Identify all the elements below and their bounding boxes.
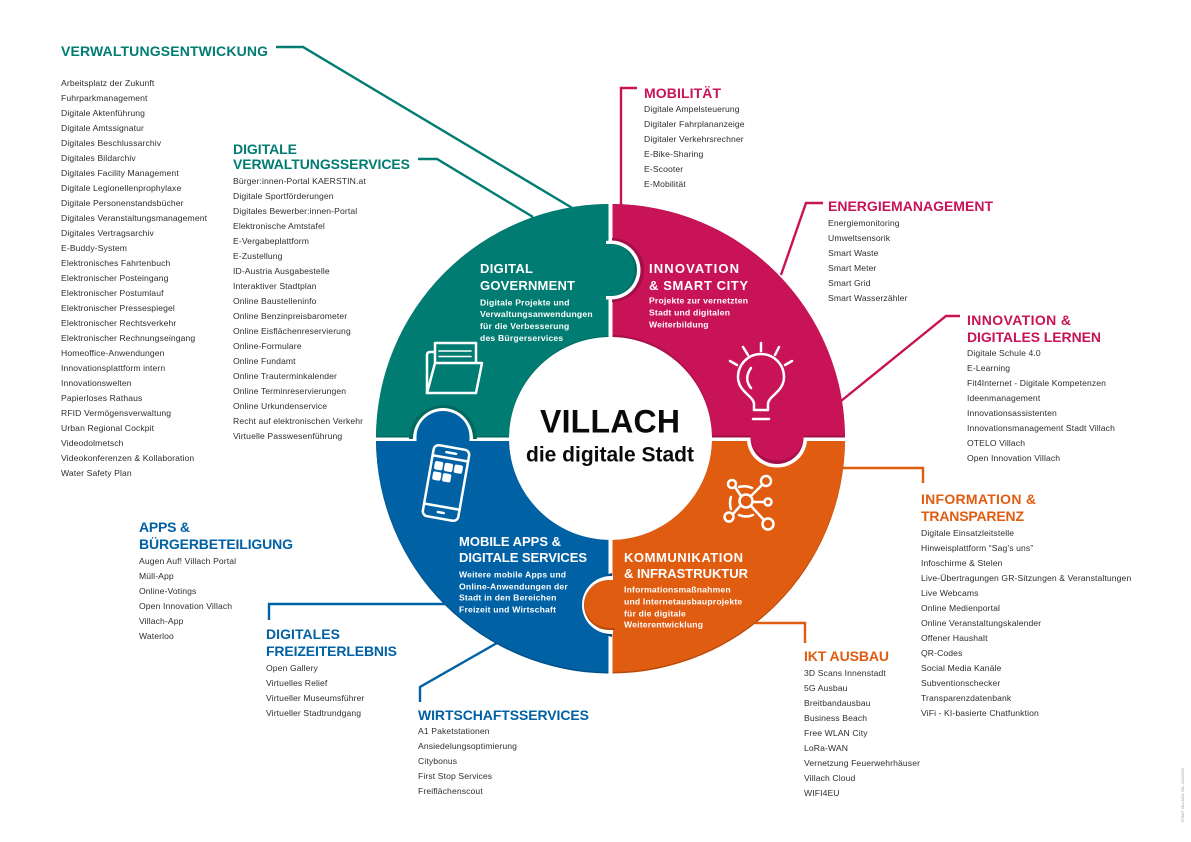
text block: Wirtschaftsservices: Ansiedelungsoptimierung [418,741,517,751]
connector: Innovation und digitales Lernen [841,316,960,401]
text block: Wirtschaftsservices: WIRTSCHAFTSSERVICES [418,707,589,723]
heading: Innovation und Smart City panel text: & SMART CITY [649,278,748,293]
text block: Information und Transparenz: Transparenzdatenbank [921,693,1012,703]
text block: IKT Ausbau: Business Beach [804,713,867,723]
text block: Information und Transparenz: Offener Haushalt [921,633,988,643]
heading: Mobile Apps panel text: Freizeit und Wirtschaft [459,604,556,614]
heading: Digital Government panel text: Digitale Projekte und [480,298,570,308]
text block: Mobilität: Digitaler Fahrplananzeige [644,119,745,129]
text block: Innovation und digitales Lernen: DIGITALES LERNEN [967,329,1101,345]
text block: Verwaltungsentwicklung: Videodolmetsch [61,438,124,448]
text block: Verwaltungsentwicklung: Elektronischer Rechtsverkehr [61,318,176,328]
icon: smartphone [422,444,470,522]
text block: IKT Ausbau: Villach Cloud [804,773,856,783]
text block: IKT Ausbau: LoRa-WAN [804,743,848,753]
text block: Verwaltungsentwicklung: Water Safety Plan [61,468,132,478]
heading: Digital Government panel text: GOVERNMENT [480,278,575,293]
text block: Digitales Freizeiterlebnis: Open Gallery [266,663,319,673]
text block: IKT Ausbau: 5G Ausbau [804,683,848,693]
text block: Information und Transparenz: ViFi - KI-basierte Chatfunktion [921,708,1039,718]
text block: Digitale Verwaltungsservices: E-Zustellung [233,251,283,261]
heading: Innovation und Smart City panel text: INNOVATION [649,261,739,276]
text block: Digitales Freizeiterlebnis: DIGITALES [266,626,340,642]
connector: Digitales Freizeiterlebnis [269,604,459,620]
text block: Verwaltungsentwicklung: Videokonferenzen & Kollaboration [61,453,194,463]
text block: IKT Ausbau [804,648,920,798]
text block: Innovation und digitales Lernen: Fit4Internet - Digitale Kompetenzen [967,378,1106,388]
text block: Mobilität: E-Bike-Sharing [644,149,703,159]
text block: Innovation und digitales Lernen: Innovationsassistenten [967,408,1057,418]
text block: Wirtschaftsservices: Freiflächenscout [418,786,483,796]
text block: Innovation und digitales Lernen: Innovationsmanagement Stadt Villach [967,423,1115,433]
heading: Kommunikation panel text [624,550,749,630]
text block: Digitales Freizeiterlebnis: Virtueller Museumsführer [266,693,365,703]
text block: Digitale Verwaltungsservices: Online-Formulare [233,341,302,351]
text block: Energiemanagement: Umweltsensorik [828,233,891,243]
text block: IKT Ausbau: IKT AUSBAU [804,648,889,664]
text block: Verwaltungsentwicklung: Digitales Beschlussarchiv [61,138,162,148]
text block: Verwaltungsentwicklung: Digitale Legionellenprophylaxe [61,183,181,193]
text block: Information und Transparenz: Subventionschecker [921,678,1000,688]
heading: Innovation und Smart City panel text [649,261,748,330]
text block: Mobilität: Digitaler Verkehrsrechner [644,134,744,144]
text block: Digitales Freizeiterlebnis [266,626,397,718]
text block: Verwaltungsentwicklung: Digitale Personenstandsbücher [61,198,184,208]
connector: IKT Ausbau [755,623,805,643]
text block: Energiemanagement: ENERGIEMANAGEMENT [828,198,993,214]
text block: Energiemanagement: Smart Wasserzähler [828,293,908,303]
text block: Information und Transparenz [921,491,1131,718]
heading: Innovation und Smart City panel text: Projekte zur vernetzten [649,296,748,306]
heading: Mobile Apps panel text: Online-Anwendungen der [459,582,568,592]
text block: Digitale Verwaltungsservices [233,141,410,441]
text block: Verwaltungsentwicklung: RFID Vermögensverwaltung [61,408,171,418]
connector: Digitale Verwaltungsservices [418,159,533,217]
text block: Mobilität: Digitale Ampelsteuerung [644,104,740,114]
text block: Verwaltungsentwicklung: Digitale Amtssignatur [61,123,144,133]
text block: Innovation und digitales Lernen: E-Learning [967,363,1010,373]
text block: Digitale Verwaltungsservices: ID-Austria Ausgabestelle [233,266,330,276]
heading: Innovation und Smart City panel text: Stadt und digitalen [649,308,730,318]
panel: Mobile Apps und digitale Services sector [376,441,608,674]
heading: Digital Government panel text: für die Verbesserung [480,321,570,331]
text block: Verwaltungsentwicklung: Digitale Aktenführung [61,108,145,118]
text block: Apps und Bürgerbeteiligung: Müll-App [139,571,174,581]
heading: Mobile Apps panel text [459,534,587,614]
text block: Verwaltungsentwicklung: Homeoffice-Anwendungen [61,348,165,358]
text block: Information und Transparenz: Hinweisplattform “Sag’s uns” [921,543,1033,553]
text block: IKT Ausbau: Free WLAN City [804,728,868,738]
text block: Verwaltungsentwicklung: Arbeitsplatz der Zukunft [61,78,155,88]
text block: Verwaltungsentwicklung: Innovationswelten [61,378,132,388]
text block: Wirtschaftsservices [418,707,589,796]
heading: Digital Government panel text: des Bürgerservices [480,333,563,343]
text block: Verwaltungsentwicklung [61,43,268,478]
heading: Kommunikation panel text: & INFRASTRUKTUR [624,566,749,581]
text block: Digitale Verwaltungsservices: Online Terminreservierungen [233,386,346,396]
text block: Digitale Verwaltungsservices: Bürger:innen-Portal KAERSTIN.at [233,176,366,186]
text block: IKT Ausbau: Breitbandausbau [804,698,871,708]
text block: Digitale Verwaltungsservices: VERWALTUNGSSERVICES [233,156,410,172]
heading: Digital Government panel text [480,261,593,343]
panel: Digital Government sector [376,204,608,438]
text block: Verwaltungsentwicklung: Digitales Bildarchiv [61,153,136,163]
text block: Verwaltungsentwicklung: E-Buddy-System [61,243,127,253]
text block: Digitale Verwaltungsservices: E-Vergabeplattform [233,236,309,246]
heading: Kommunikation panel text: Informationsmaßnahmen [624,584,731,594]
text block: Digitale Verwaltungsservices: Recht auf elektronischen Verkehr [233,416,363,426]
text block: Innovation und digitales Lernen [967,312,1115,463]
text block: Verwaltungsentwicklung: Elektronischer Pressespiegel [61,303,175,313]
icon: network [724,476,774,530]
text block: Information und Transparenz: QR-Codes [921,648,962,658]
text block: Mobilität [644,85,745,189]
text block: Information und Transparenz: Infoschirme & Stelen [921,558,1003,568]
title: VILLACH [540,404,680,440]
text block: Verwaltungsentwicklung: Elektronischer Postumlauf [61,288,164,298]
text block: Verwaltungsentwicklung: Papierloses Rathaus [61,393,142,403]
heading: Mobile Apps panel text: Stadt in den Bereichen [459,592,557,602]
text block: Verwaltungsentwicklung: Elektronisches Fahrtenbuch [61,258,170,268]
heading: Mobile Apps panel text: DIGITALE SERVICES [459,550,587,565]
text block: Information und Transparenz: TRANSPARENZ [921,508,1024,524]
text block: Digitale Verwaltungsservices: Virtuelle Passwesenführung [233,431,342,441]
text block: Innovation und digitales Lernen: INNOVATION & [967,312,1071,328]
puzzle knob: teal into magenta [606,238,644,302]
text block: Apps und Bürgerbeteiligung [139,519,293,641]
puzzle knob: orange into blue [582,573,615,637]
text block: Apps und Bürgerbeteiligung: Waterloo [139,631,174,641]
title [526,404,694,466]
text block: Digitale Verwaltungsservices: Elektronische Amtstafel [233,221,325,231]
text block: Digitale Verwaltungsservices: Online Benzinpreisbarometer [233,311,347,321]
text block: Energiemanagement: Smart Grid [828,278,871,288]
icon: folder [427,343,482,393]
text block: Information und Transparenz: Online Medienportal [921,603,1000,613]
text block: Apps und Bürgerbeteiligung: Villach-App [139,616,184,626]
heading: Kommunikation panel text: und Internetausbauprojekte [624,596,742,606]
text block: Digitales Freizeiterlebnis: FREIZEITERLEBNIS [266,643,397,659]
text block: Verwaltungsentwicklung: Innovationsplattform intern [61,363,165,373]
text block: Apps und Bürgerbeteiligung: Open Innovation Villach [139,601,232,611]
text block: Mobilität: E-Scooter [644,164,683,174]
text block: Wirtschaftsservices: First Stop Services [418,771,492,781]
text block: Verwaltungsentwicklung: Fuhrparkmanagement [61,93,148,103]
text block: Verwaltungsentwicklung: Elektronischer Rechnungseingang [61,333,195,343]
text block: Verwaltungsentwicklung: Digitales Vertragsarchiv [61,228,155,238]
text block: IKT Ausbau: Vernetzung Feuerwehrhäuser [804,758,920,768]
text block: Digitale Verwaltungsservices: Digitales Bewerber:innen-Portal [233,206,357,216]
text block: IKT Ausbau: 3D Scans Innenstadt [804,668,886,678]
text block: Digitale Verwaltungsservices: Online Trauterminkalender [233,371,337,381]
text block: Digitale Verwaltungsservices: Online Eisflächenreservierung [233,326,351,336]
heading: Kommunikation panel text: für die digitale [624,608,686,618]
text block: Mobilität: E-Mobilität [644,179,686,189]
puzzle knob: blue into teal [409,405,477,443]
heading: Digital Government panel text: DIGITAL [480,261,533,276]
text block: Energiemanagement [828,198,993,303]
text block: Digitale Verwaltungsservices: Digitale Sportförderungen [233,191,334,201]
heading: Kommunikation panel text: Weiterentwicklung [624,620,703,630]
text block: Innovation und digitales Lernen: OTELO Villach [967,438,1025,448]
text block: Information und Transparenz: INFORMATION & [921,491,1036,507]
text block: Information und Transparenz: Digitale Einsatzleitstelle [921,528,1014,538]
text block: Digitales Freizeiterlebnis: Virtueller Stadtrundgang [266,708,361,718]
text block: Energiemanagement: Smart Waste [828,248,879,258]
heading: Innovation und Smart City panel text: Weiterbildung [649,320,709,330]
text block: Verwaltungsentwicklung: Digitales Veranstaltungsmanagement [61,213,208,223]
text block: Innovation und digitales Lernen: Open Innovation Villach [967,453,1060,463]
text block: Digitale Verwaltungsservices: Online Fundamt [233,356,296,366]
heading: Mobile Apps panel text: Weitere mobile Apps und [459,570,566,580]
text block: Verwaltungsentwicklung: Elektronischer Posteingang [61,273,169,283]
text block: Digitale Verwaltungsservices: Online Urkundenservice [233,401,327,411]
text block: Apps und Bürgerbeteiligung: Augen Auf! Villach Portal [139,556,236,566]
puzzle knob: magenta into orange [747,434,807,468]
text block: Verwaltungsentwicklung: Urban Regional Cockpit [61,423,155,433]
text block: Information und Transparenz: Social Media Kanäle [921,663,1002,673]
text block: Apps und Bürgerbeteiligung: BÜRGERBETEILIGUNG [139,536,293,552]
text block: Energiemanagement: Smart Meter [828,263,877,273]
text block: Apps und Bürgerbeteiligung: Online-Votings [139,586,196,596]
panel: Innovation und Smart City sector [612,204,845,438]
text block: Apps und Bürgerbeteiligung: APPS & [139,519,190,535]
connector: Energiemanagement [781,203,823,275]
text block: Digitale Verwaltungsservices: Interaktiver Stadtplan [233,281,317,291]
text block: Verwaltungsentwicklung: VERWALTUNGSENTWICKUNG [61,43,268,59]
text block: Verwaltungsentwicklung: Digitales Facility Management [61,168,179,178]
text block: Digitales Freizeiterlebnis: Virtuelles Relief [266,678,328,688]
text block: Energiemanagement: Energiemonitoring [828,218,900,228]
text block: Information und Transparenz: Online Veranstaltungskalender [921,618,1041,628]
icon: light bulb [730,343,792,419]
connector: Wirtschaftsservices [420,643,497,702]
connector: Mobilität [621,88,637,205]
text block: Digitale Verwaltungsservices: Online Baustelleninfo [233,296,317,306]
text block: Digitale Verwaltungsservices: DIGITALE [233,141,297,157]
connector: Information und Transparenz [842,468,923,483]
title: die digitale Stadt [526,444,694,466]
panel: Kommunikation und Infrastruktur sector [612,441,845,674]
imprint: STADT VILLACH, ÖA, 20220320 [1181,768,1185,822]
text block: Wirtschaftsservices: A1 Paketstationen [418,726,490,736]
text block: IKT Ausbau: WIFI4EU [804,788,840,798]
text block: Wirtschaftsservices: Citybonus [418,756,457,766]
heading: Kommunikation panel text: KOMMUNIKATION [624,550,743,565]
text block: Mobilität: MOBILITÄT [644,85,721,101]
heading: Mobile Apps panel text: MOBILE APPS & [459,534,561,549]
text block: Innovation und digitales Lernen: Digitale Schule 4.0 [967,348,1041,358]
heading: Digital Government panel text: Verwaltungsanwendungen [480,309,593,319]
connector: Verwaltungsentwicklung [276,47,574,209]
text block: Information und Transparenz: Live Webcams [921,588,979,598]
text block: Innovation und digitales Lernen: Ideenmanagement [967,393,1041,403]
text block: Information und Transparenz: Live-Übertragungen GR-Sitzungen & Veranstaltungen [921,573,1131,583]
